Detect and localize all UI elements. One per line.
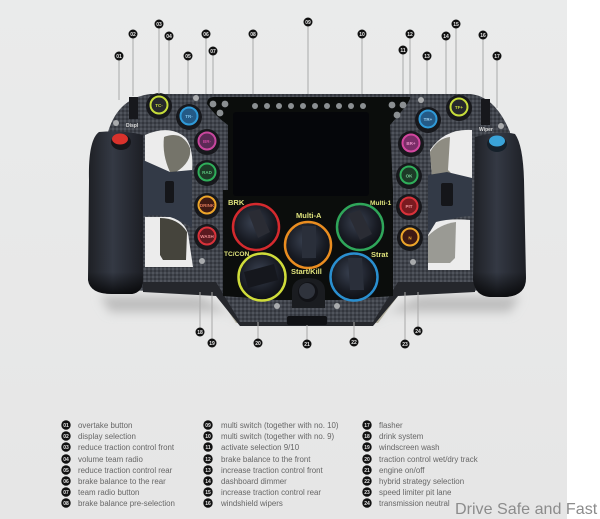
callout 16: [478, 30, 488, 98]
flasher button: [487, 136, 507, 152]
button: PIT: PIT: [405, 204, 413, 209]
legend column 1: team radio button: [78, 488, 139, 497]
callout 24: [414, 292, 422, 336]
legend column 3: hybrid strategy selection: [379, 477, 464, 486]
wipers switch: Wiper: [479, 127, 493, 133]
watermark: Drive Safe and Fast: [455, 500, 598, 518]
legend column 1: reduce traction control front: [78, 443, 175, 452]
legend column 1: 01: [63, 423, 69, 429]
button: TR+: [415, 107, 441, 133]
wipers switch: [479, 99, 493, 133]
bottom callouts: [196, 292, 422, 348]
legend column 1: reduce traction control rear: [78, 466, 173, 475]
callout 05: [184, 52, 192, 94]
legend column 1: 02: [63, 434, 69, 440]
legend column 1: 04: [63, 457, 69, 463]
legend column 3: 17: [364, 423, 370, 429]
legend column 1: brake balance pre-selection: [78, 499, 175, 508]
engine start/kill button: Start/Kill: [291, 267, 322, 276]
display selection switch: Displ: [126, 123, 139, 129]
legend column 2: 10: [205, 434, 211, 440]
legend column 2: multi switch (together with no. 10): [221, 421, 339, 430]
callout 24: 24: [415, 329, 421, 335]
callout 08: [248, 30, 258, 94]
callout 22: [350, 322, 358, 346]
button: drink: [194, 193, 220, 219]
legend column 2: windshield wipers: [220, 499, 283, 508]
legend column 3: engine on/off: [379, 466, 425, 475]
legend column 1: 07: [63, 490, 69, 496]
callout 20: 20: [255, 341, 261, 347]
knob: Multi-1: Multi-1: [370, 200, 392, 207]
left grip end: [88, 272, 143, 294]
legend column 2: dashboard dimmer: [221, 477, 287, 486]
overtake button: [111, 134, 131, 150]
button: RAD: [194, 160, 220, 186]
knob: TC/CON: TC/CON: [224, 251, 250, 258]
legend column 2: 14: [205, 479, 211, 485]
callout 15: [452, 20, 460, 94]
legend column 3: [362, 420, 478, 508]
legend column 3: flasher: [379, 421, 403, 430]
callout 03: 03: [156, 22, 162, 28]
left arm: [143, 160, 192, 228]
legend column 1: 08: [63, 501, 69, 507]
callout 07: 07: [210, 49, 216, 55]
legend column 3: 24: [364, 501, 370, 507]
carbon body: [108, 94, 510, 322]
knob: Multi-A: [285, 211, 331, 268]
legend column 2: brake balance to the front: [221, 455, 311, 464]
right arm: [428, 172, 472, 232]
callout 14: 14: [443, 34, 449, 40]
callout 05: 05: [185, 54, 191, 60]
knob: TC/CON: [224, 251, 286, 300]
lower bar shade: [143, 282, 475, 326]
button: wash: WASH: [200, 234, 214, 239]
callout 08: 08: [250, 32, 256, 38]
button: OK: OK: [406, 174, 413, 178]
button: TF+: [446, 95, 472, 121]
legend column 2: increase traction control front: [221, 466, 324, 475]
button: TC-: TC-: [155, 103, 163, 108]
left upper hole: [145, 130, 192, 172]
button: BR-: BR-: [203, 139, 211, 144]
legend column 2: multi switch (together with no. 9): [221, 432, 335, 441]
display selection switch: [126, 97, 139, 129]
callout 04: [164, 32, 174, 94]
callout 20: [254, 322, 262, 348]
legend column 1: 06: [63, 479, 69, 485]
right rocker switch: [441, 183, 453, 206]
steering wheel: [88, 93, 526, 326]
callout 18: 18: [197, 330, 203, 336]
left rocker switch: [165, 181, 174, 203]
legend column 3: traction control wet/dry track: [379, 455, 478, 464]
legend column 2: [203, 420, 339, 508]
button: TR-: TR-: [185, 114, 193, 119]
button: N: N: [408, 236, 412, 240]
callout 13: 13: [424, 54, 430, 60]
right lower hole: [428, 219, 470, 270]
knob: Strat: [330, 250, 389, 300]
callout 09: 09: [305, 20, 311, 26]
button: BR+: [398, 131, 424, 157]
shift light row: [210, 101, 406, 118]
legend column 2: increase traction control rear: [221, 488, 321, 497]
callout 17: 17: [494, 54, 500, 60]
engine start/kill button: [291, 267, 325, 308]
legend column 2: 11: [205, 445, 211, 451]
callout 03: [154, 20, 164, 94]
legend column 3: transmission neutral: [379, 499, 450, 508]
button: wash: [194, 224, 220, 250]
callout 01: [114, 52, 124, 100]
floor shadow: [100, 296, 520, 318]
callout 21: 21: [304, 342, 310, 348]
callout 06: 06: [203, 32, 209, 38]
button: BR+: BR+: [406, 141, 416, 146]
knob: BRK: BRK: [228, 198, 245, 207]
legend column 2: 15: [205, 490, 211, 496]
right upper paddle: [430, 137, 455, 177]
callout 22: 22: [351, 340, 357, 346]
callout 11: [398, 46, 408, 94]
legend column 3: 22: [364, 479, 370, 485]
under-panel tan supports: [218, 296, 398, 323]
left grip: [88, 131, 143, 294]
callout 12: 12: [407, 32, 413, 38]
callout 15: 15: [453, 22, 459, 28]
legend column 3: drink system: [379, 432, 424, 441]
button: BR-: [194, 129, 220, 155]
knob: Multi-1: [337, 200, 392, 250]
button: TR-: [176, 104, 202, 130]
callout 09: [304, 18, 312, 94]
top callouts: [114, 18, 502, 108]
left lower hole: [145, 217, 193, 267]
legend column 1: display selection: [78, 432, 136, 441]
display screen: [233, 112, 369, 196]
callout 06: [202, 30, 210, 94]
callout 10: [358, 30, 366, 94]
button: PIT: [396, 194, 422, 220]
left lower paddle: [160, 218, 187, 260]
callout 01: 01: [116, 54, 122, 60]
callout 18: [196, 292, 204, 336]
callout 17: [492, 52, 502, 108]
centre black panel: [207, 97, 410, 300]
left upper paddle: [164, 135, 190, 172]
legend column 1: 03: [63, 445, 69, 451]
callout 14: [442, 32, 450, 94]
callout 02: 02: [130, 32, 136, 38]
right grip end: [473, 272, 526, 297]
bottom tab: [287, 316, 327, 325]
legend: [61, 420, 478, 508]
legend column 1: volume team radio: [78, 455, 144, 464]
legend column 1: brake balance to the rear: [78, 477, 166, 486]
knob: Strat: Strat: [371, 250, 389, 259]
callout 12: [406, 30, 414, 94]
button: TF+: TF+: [455, 105, 463, 110]
callout 04: 04: [166, 34, 172, 40]
legend column 3: 20: [364, 457, 370, 463]
legend column 3: windscreen wash: [378, 443, 440, 452]
legend column 3: 23: [364, 490, 370, 496]
legend column 2: 13: [205, 468, 211, 474]
knob: BRK: [228, 198, 279, 250]
callout 10: 10: [359, 32, 365, 38]
button: OK: [396, 163, 422, 189]
legend column 2: 16: [205, 501, 211, 507]
callout 19: 19: [209, 341, 215, 347]
legend column 3: speed limiter pit lane: [379, 488, 452, 497]
right lower paddle: [428, 222, 456, 263]
legend column 2: 09: [205, 423, 211, 429]
mounting screws: [113, 95, 504, 309]
callout 23: [400, 292, 410, 348]
callout 13: [422, 52, 432, 94]
button: RAD: RAD: [202, 170, 213, 175]
callout 02: [128, 30, 138, 96]
callout 23: 23: [402, 342, 408, 348]
legend column 3: 18: [364, 434, 370, 440]
button: TR+: TR+: [424, 117, 433, 122]
legend column 1: overtake button: [78, 421, 132, 430]
legend column 1: 05: [63, 468, 69, 474]
legend column 2: activate selection 9/10: [221, 443, 300, 452]
right upper hole: [430, 130, 472, 178]
button: TC-: [146, 93, 172, 119]
callout 19: [208, 292, 216, 348]
button: drink: DRINK: [200, 203, 215, 208]
button: N: [397, 225, 423, 251]
legend column 1: [61, 420, 175, 508]
callout 21: [302, 325, 312, 348]
right grip: [473, 133, 526, 297]
callout 16: 16: [480, 33, 486, 39]
knob: Multi-A: Multi-A: [296, 211, 322, 220]
legend column 3: 21: [364, 468, 370, 474]
legend column 3: 19: [364, 445, 370, 451]
legend column 2: 12: [205, 457, 211, 463]
callout 07: [208, 46, 218, 94]
callout 11: 11: [400, 48, 406, 54]
